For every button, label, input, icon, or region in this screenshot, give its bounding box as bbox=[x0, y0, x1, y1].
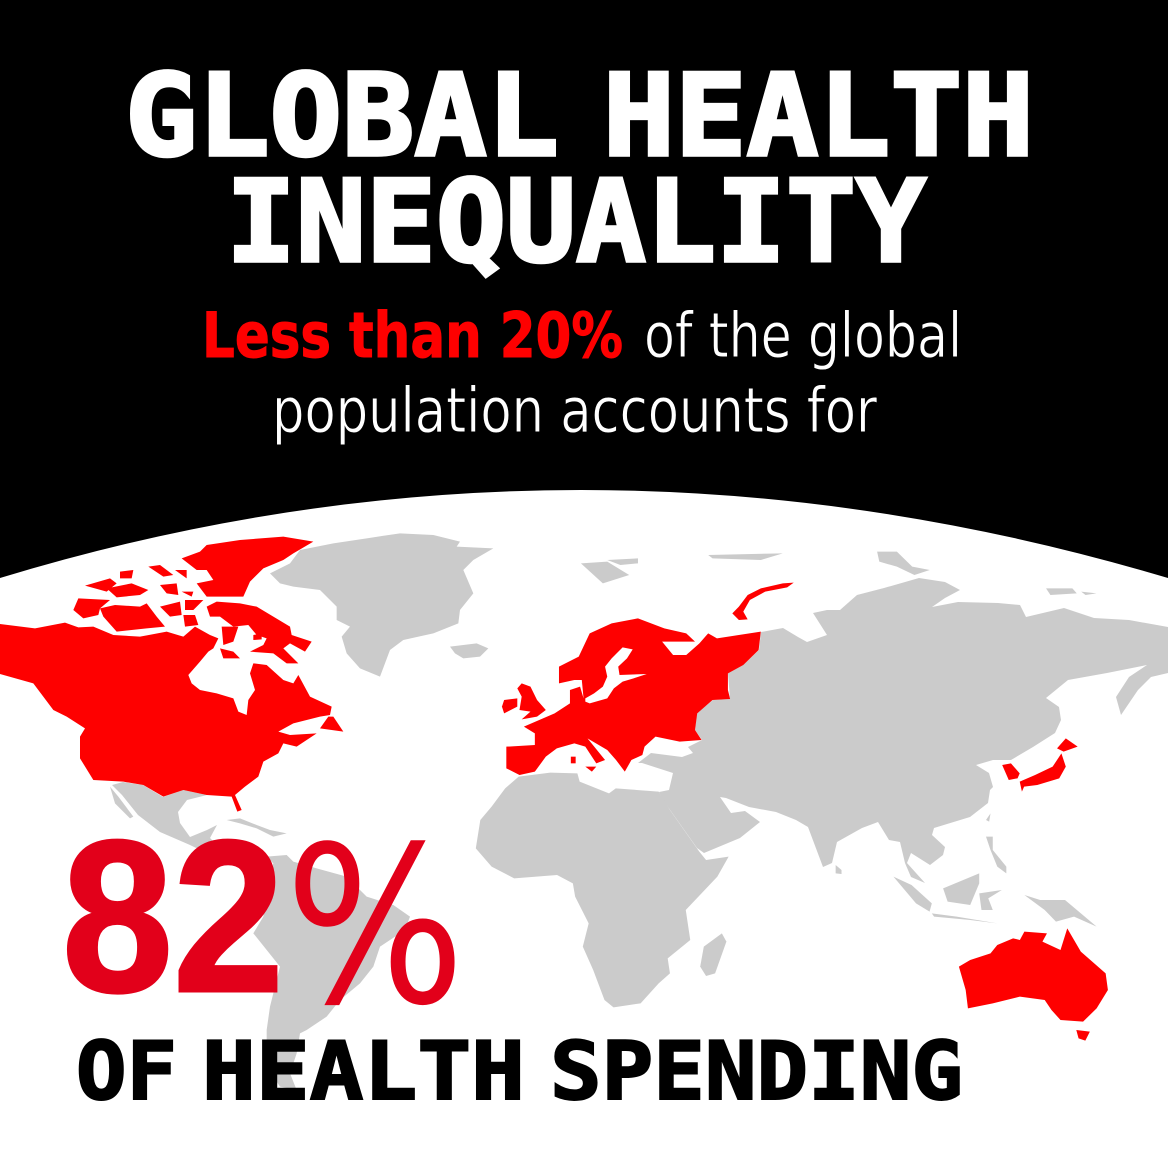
subtitle: population accounts for bbox=[272, 374, 877, 447]
title: HEALTH bbox=[603, 50, 1034, 182]
subtitle: of the global bbox=[644, 299, 962, 372]
title: GLOBAL bbox=[125, 50, 559, 182]
Eurasia bbox=[638, 578, 1168, 883]
subtitle: Less than 20% bbox=[202, 299, 623, 372]
white globe panel bbox=[0, 490, 1168, 1168]
Africa, Madagascar, Southeast Asia islands bbox=[476, 773, 1097, 1007]
North America bbox=[0, 537, 343, 812]
big statistic: 82%: % bbox=[285, 801, 465, 1054]
big statistic: 82%: 82 bbox=[62, 795, 284, 1037]
subtitle bbox=[202, 299, 962, 447]
caption: of health spending: OF bbox=[76, 1025, 177, 1118]
map: red regions bbox=[0, 537, 1108, 1041]
caption: of health spending bbox=[76, 1025, 963, 1118]
Australia and Tasmania bbox=[959, 928, 1108, 1041]
Mexico and Central America bbox=[112, 782, 273, 865]
title bbox=[125, 50, 1034, 288]
Greenland and Iceland bbox=[110, 533, 493, 837]
world map bbox=[0, 533, 1168, 1090]
caption: of health spending: HEALTH bbox=[202, 1025, 525, 1118]
Arctic islands bbox=[581, 552, 1097, 595]
South America bbox=[253, 855, 410, 1090]
Europe, Korea and Japan bbox=[502, 583, 1078, 792]
title: INEQUALITY bbox=[226, 156, 926, 288]
big statistic: 82% bbox=[62, 795, 465, 1054]
map: grey regions bbox=[110, 533, 1168, 1090]
caption: of health spending: SPENDING bbox=[550, 1025, 963, 1118]
